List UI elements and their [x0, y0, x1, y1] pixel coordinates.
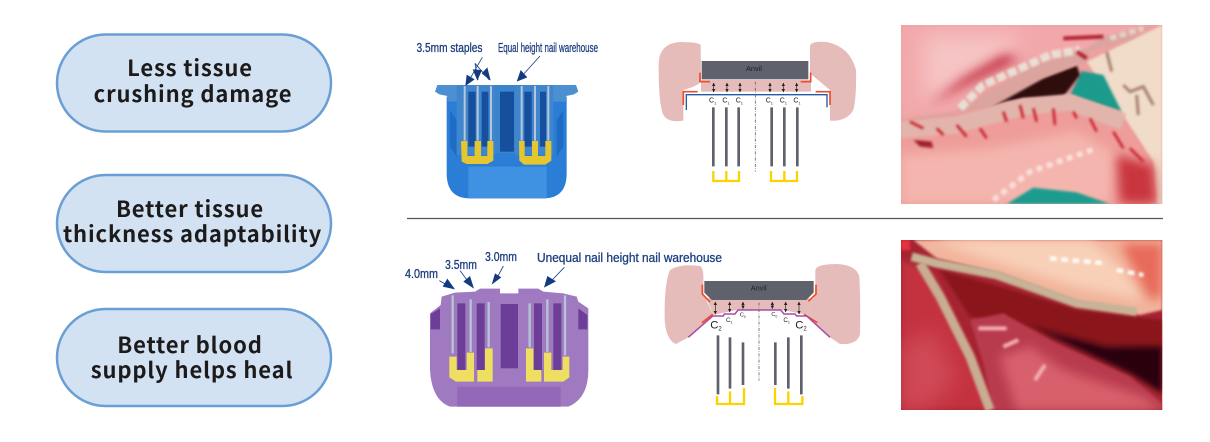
unequal height anvil schematic: 0 [744, 315, 746, 319]
equal height anvil schematic: 1 [714, 100, 717, 105]
4mm 3.5mm 3mm cartridge diagram [405, 250, 722, 407]
pill: less tissue crushing damage: Less tissue [127, 51, 253, 83]
equal height anvil schematic: C [793, 98, 798, 105]
anvil: Anvil [746, 64, 762, 73]
photo: unequal height result [901, 240, 1162, 410]
anvil: Anvil [751, 284, 767, 293]
tissue left [659, 42, 701, 121]
equal height anvil schematic: C [766, 98, 771, 105]
label: 3.5mm: 3.5mm [445, 258, 477, 272]
unequal height anvil schematic: C [795, 320, 803, 332]
pill: better tissue thickness adaptability [57, 175, 331, 272]
equal height anvil schematic: 1 [785, 100, 788, 105]
pill: less tissue crushing damage [57, 34, 331, 132]
equal height anvil schematic: C [709, 98, 714, 105]
label: unequal nail height nail warehouse: Unequal nail height nail warehouse [537, 251, 722, 265]
unequal height anvil schematic: 0 [775, 314, 777, 318]
unequal height anvil schematic [665, 264, 860, 404]
equal height anvil schematic: C [736, 98, 741, 105]
pill: better tissue thickness adaptability: thickness adaptability [63, 217, 322, 249]
unequal height anvil schematic: C [783, 317, 788, 324]
pill: better blood supply helps heal: supply helps heal [91, 353, 293, 385]
pill: better blood supply helps heal: Better blood [117, 328, 263, 360]
purple cartridge [430, 266, 588, 407]
unequal height anvil schematic: C [771, 312, 775, 318]
unequal height anvil schematic: 2 [718, 326, 722, 332]
anvil [704, 281, 814, 300]
pill: better blood supply helps heal [57, 309, 331, 406]
divider [407, 218, 1163, 220]
tissue right [810, 42, 856, 121]
tissue right [807, 264, 860, 344]
tissue left [665, 265, 713, 344]
equal height anvil schematic: 1 [771, 100, 774, 105]
unequal height anvil schematic: C [710, 320, 718, 332]
pill: less tissue crushing damage: crushing damage [94, 77, 292, 109]
equal height anvil schematic: 1 [741, 100, 744, 105]
label: 4.0mm: 4.0mm [405, 267, 438, 281]
unequal height anvil schematic: C [726, 317, 731, 324]
unequal height anvil schematic: 2 [803, 326, 807, 332]
label: 3.5mm staples: 3.5mm staples [416, 41, 482, 55]
unequal height anvil schematic: C [740, 313, 744, 319]
equal height cartridge diagram [416, 41, 598, 198]
unequal height anvil schematic: 1 [731, 320, 733, 324]
photo: equal height result [901, 25, 1162, 204]
unequal height anvil schematic: 1 [788, 320, 790, 324]
label: 3.0mm: 3.0mm [485, 250, 517, 264]
label: equal height nail warehouse: Equal height nail warehouse [498, 41, 598, 55]
equal height anvil schematic: 1 [727, 100, 730, 105]
anvil [702, 61, 808, 79]
equal height anvil schematic [659, 42, 856, 181]
equal height anvil schematic: 1 [798, 100, 801, 105]
equal height anvil schematic: C [722, 98, 727, 105]
equal height anvil schematic: C [780, 98, 785, 105]
blue cartridge [435, 56, 578, 198]
pill: better tissue thickness adaptability: Better tissue [116, 192, 264, 224]
